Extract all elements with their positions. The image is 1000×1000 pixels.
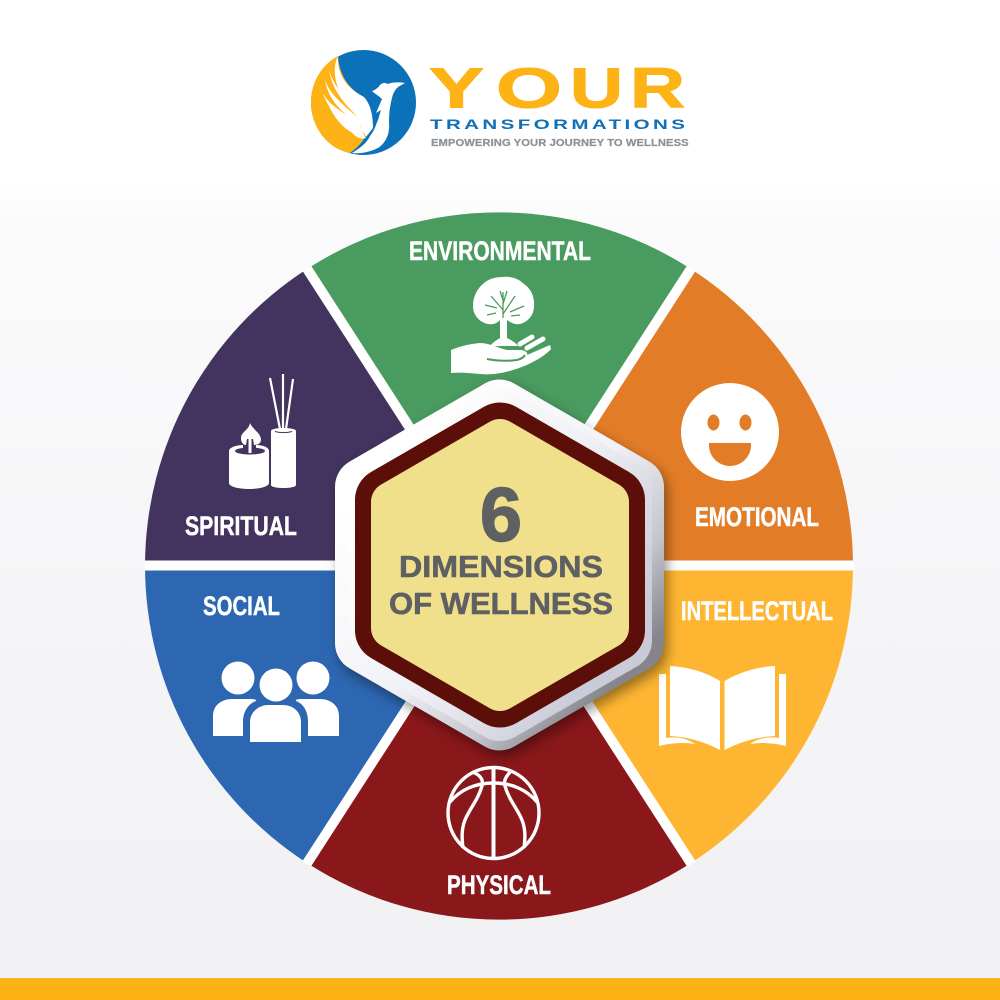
label: physical: PHYSICAL — [447, 870, 551, 900]
hexagon yellow core — [391, 439, 609, 691]
hexagon outer frame — [364, 408, 635, 722]
center number: 6 — [480, 473, 522, 558]
segment: spiritual — [145, 269, 499, 566]
logo wordmark YOUR: U — [570, 56, 623, 120]
logo — [311, 50, 689, 155]
segment: social — [145, 566, 499, 863]
logo wordmark TRANSFORMATIONS: TRANSFORMATIONS — [430, 116, 685, 132]
label: environmental: ENVIRONMENTAL — [409, 236, 591, 266]
logo emblem: phoenix — [311, 50, 416, 155]
logo tagline: EMPOWERING YOUR JOURNEY TO WELLNESS — [431, 138, 689, 149]
icon: tree in hand — [451, 277, 551, 374]
hexagon dark ring — [387, 434, 613, 696]
icon: candles and reed diffuser — [229, 374, 296, 489]
segment: physical — [307, 566, 691, 920]
bottom bar — [0, 978, 1000, 1000]
icon: open book — [659, 666, 786, 750]
segment: emotional — [499, 269, 853, 566]
center hexagon badge — [364, 408, 638, 728]
center title line 2: OF WELLNESS — [389, 586, 613, 621]
logo wordmark YOUR: Y — [429, 56, 484, 120]
hexagon inner frame — [378, 419, 622, 711]
label: social: SOCIAL — [203, 591, 280, 621]
segment: environmental — [307, 212, 691, 566]
logo wordmark YOUR — [429, 56, 685, 120]
label: emotional: EMOTIONAL — [695, 502, 819, 532]
logo wordmark YOUR: R — [630, 56, 685, 120]
center title line 1: DIMENSIONS — [399, 549, 603, 584]
label: spiritual: SPIRITUAL — [185, 511, 297, 541]
label: intellectual: INTELLECTUAL — [681, 596, 833, 626]
logo wordmark YOUR: O — [496, 56, 562, 120]
wellness wheel — [140, 212, 858, 920]
icon: basketball — [448, 767, 539, 859]
icon: three people — [213, 662, 339, 742]
segment: intellectual — [499, 566, 853, 863]
icon: smiley face — [681, 383, 779, 481]
